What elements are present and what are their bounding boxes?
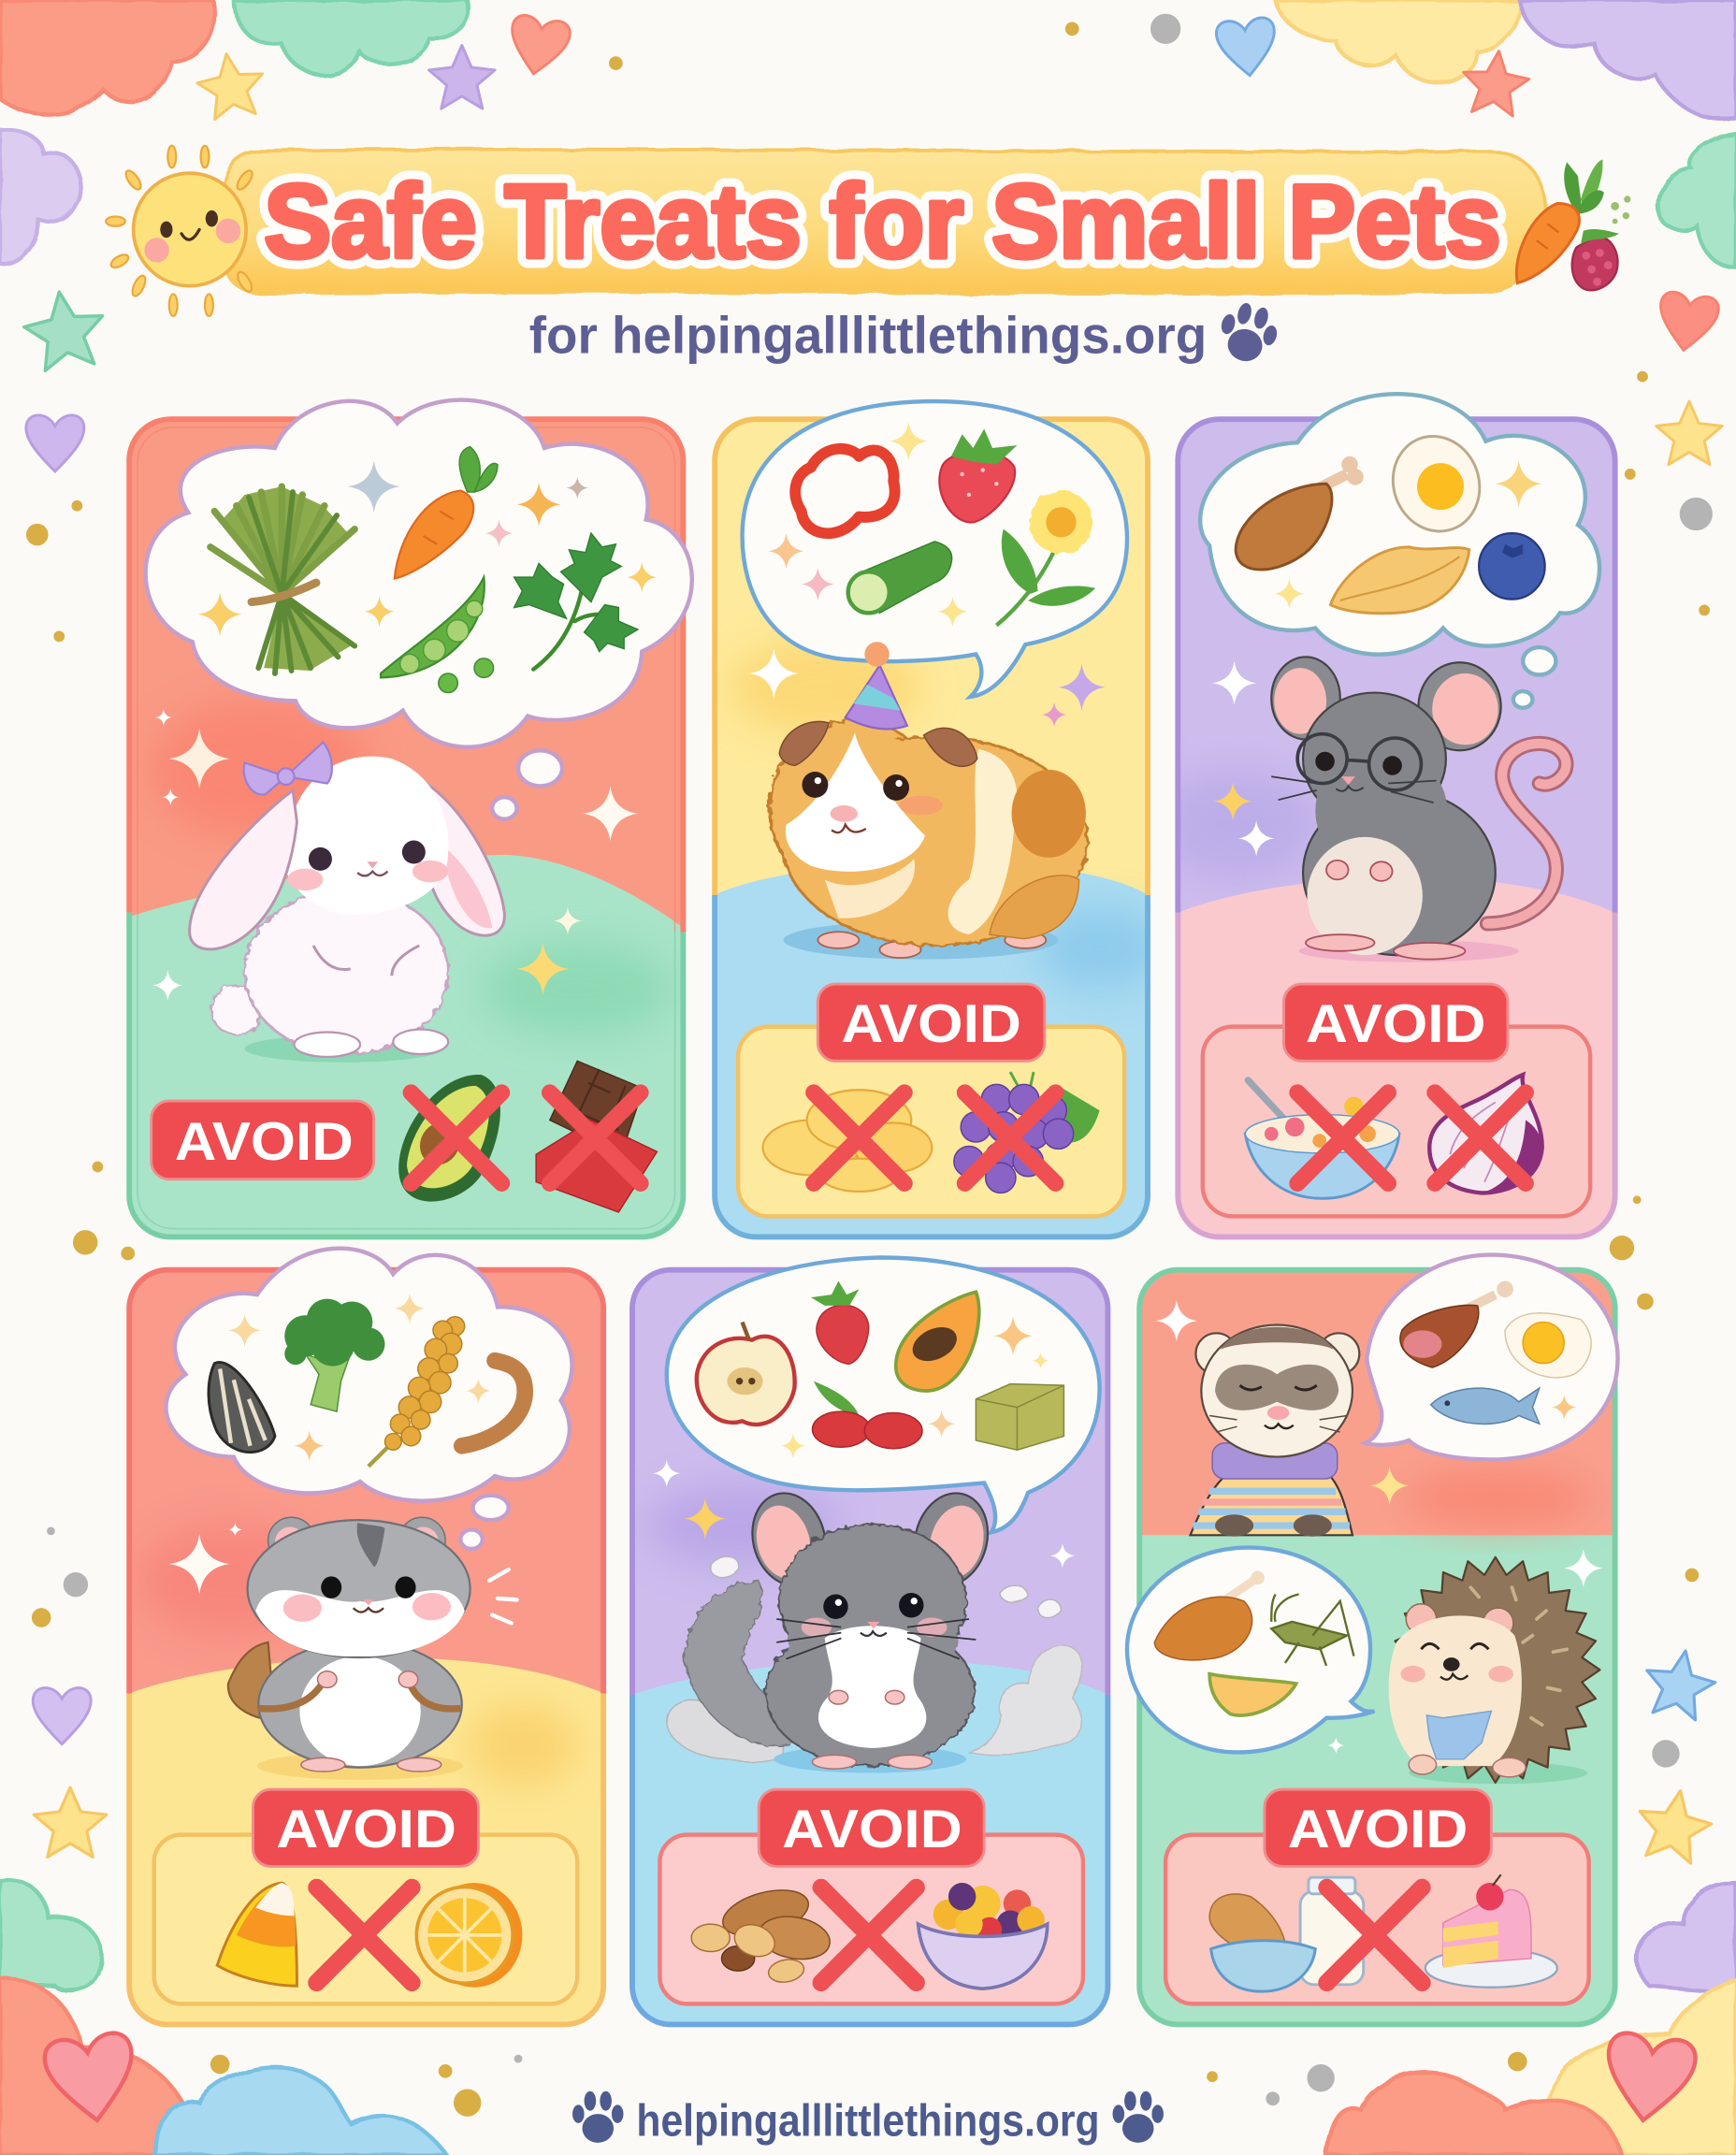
icon: strawberry	[939, 428, 1017, 523]
face	[823, 1594, 848, 1619]
icon: hay cube	[976, 1384, 1063, 1450]
glasses	[1297, 734, 1421, 790]
body	[1303, 693, 1496, 955]
patch	[1012, 770, 1086, 858]
sparkles	[152, 460, 657, 1001]
ears	[1271, 657, 1340, 740]
icon: cucumber	[848, 542, 952, 613]
guinea pig	[770, 642, 1087, 960]
ears	[1195, 1333, 1237, 1374]
ferret	[1191, 1324, 1359, 1537]
icon: potato chips crossed	[763, 1090, 932, 1192]
speech bubble lower	[1127, 1548, 1374, 1752]
right ear	[426, 784, 504, 935]
panel 2 background	[715, 419, 1162, 1237]
icon: blueberry	[1479, 533, 1545, 600]
avoid pill: AVOID	[782, 1800, 962, 1859]
speech bubble	[743, 401, 1127, 697]
header	[106, 146, 1631, 368]
paws	[313, 946, 419, 976]
head	[248, 1520, 470, 1657]
thought cloud	[166, 1249, 572, 1501]
icon: cereal bowl crossed	[1245, 1080, 1399, 1198]
icon: paw left	[572, 2091, 623, 2143]
left ear	[190, 790, 297, 949]
face	[309, 847, 332, 871]
thought cloud	[1200, 394, 1599, 655]
icon: red cross	[1327, 1887, 1422, 1983]
icon: milk jar	[1300, 1877, 1364, 1985]
icon: header raspberry	[1572, 195, 1631, 290]
head	[1201, 1324, 1353, 1457]
icon: broccoli	[284, 1299, 385, 1411]
icon: red cross	[317, 1887, 412, 1983]
icon: red pepper ring	[795, 449, 895, 533]
avoid pill	[817, 984, 1045, 1061]
icon: sunflower seed	[209, 1362, 275, 1453]
fur outline	[770, 720, 1087, 946]
icon: pea pod	[381, 577, 494, 693]
panel: chinchilla	[632, 1257, 1107, 2024]
avoid pill: AVOID	[1306, 994, 1485, 1054]
face	[321, 1576, 341, 1598]
ears	[268, 1517, 315, 1564]
icon: papaya	[896, 1292, 979, 1391]
feet	[817, 932, 1046, 958]
body	[245, 889, 448, 1054]
sparkles	[1156, 1300, 1602, 1754]
title text: Safe Treats for Small Pets	[264, 163, 1501, 280]
panel 6 background	[1139, 1270, 1615, 2024]
subtitle: for helpingalllittlethings.org	[529, 306, 1207, 365]
footer url: helpingalllittlethings.org	[636, 2095, 1100, 2146]
panel 3 background	[1154, 419, 1615, 1237]
ears	[779, 721, 829, 765]
icon: chicken drumstick	[1236, 456, 1364, 570]
icon: ham leg	[1400, 1280, 1513, 1367]
avoid pill: AVOID	[175, 1112, 354, 1172]
tail	[1487, 744, 1566, 923]
spines	[1391, 1557, 1599, 1783]
party hat	[846, 665, 907, 729]
icon: hay bundle	[210, 486, 354, 673]
sparkles	[749, 422, 1105, 727]
icon: smiling sun	[106, 146, 255, 316]
feet	[295, 1033, 360, 1057]
panel: rabbit	[129, 400, 692, 1237]
paws and feet	[1306, 861, 1465, 960]
face	[1421, 1643, 1488, 1649]
icon: strawberry	[811, 1280, 869, 1364]
icon: dandelion	[996, 491, 1095, 626]
icon: chocolate crossed	[536, 1061, 657, 1212]
footer	[572, 2091, 1164, 2146]
face	[1315, 752, 1335, 771]
face	[1239, 1385, 1317, 1390]
speech bubble top	[1365, 1255, 1618, 1459]
blue toy	[1426, 1711, 1491, 1759]
white blaze	[786, 732, 925, 872]
hedgehog feet	[1409, 1755, 1437, 1774]
icon: mealworm	[462, 1361, 525, 1446]
feet	[301, 1757, 441, 1772]
icon: bowl of dried fruit	[919, 1883, 1048, 1989]
dust clouds	[667, 1556, 1082, 1762]
icon: orange slice	[416, 1883, 522, 1988]
avoid pill	[152, 1101, 374, 1179]
panel 1 background	[129, 419, 683, 1237]
ferret paws	[1215, 1514, 1253, 1537]
head	[282, 757, 448, 915]
face	[802, 772, 828, 798]
thought cloud	[146, 400, 692, 747]
rabbit	[190, 742, 504, 1063]
tail	[211, 986, 261, 1034]
avoid pill: AVOID	[841, 994, 1021, 1054]
icon: melon slice	[1209, 1674, 1296, 1715]
icon: apple half	[697, 1323, 795, 1425]
icon: cake slice on plate	[1425, 1874, 1557, 1988]
icon: mixed nuts	[691, 1882, 833, 1985]
avoid pill	[1265, 1789, 1491, 1866]
panel: ferret and hedgehog	[1127, 1255, 1618, 2024]
hamster hands	[318, 1671, 418, 1687]
icon: cricket	[1271, 1594, 1353, 1666]
icon: roast turkey	[1154, 1571, 1265, 1660]
icon: fish	[1431, 1388, 1540, 1424]
speech bubble	[667, 1257, 1100, 1532]
white body stripe	[948, 749, 1018, 934]
thought bubbles	[1513, 647, 1555, 708]
mouse	[1271, 657, 1566, 962]
white chest and belly	[818, 1626, 926, 1748]
avoid pill	[1283, 984, 1508, 1061]
belly	[1307, 837, 1423, 955]
icon: bread in bowl	[1209, 1894, 1315, 1991]
ears	[1406, 1604, 1437, 1634]
icon: red cross	[821, 1887, 917, 1983]
icon: paw	[1214, 298, 1283, 368]
icon: candy corn	[217, 1883, 297, 1986]
panel: guinea pig	[715, 401, 1162, 1237]
icon: paw right	[1113, 2091, 1164, 2143]
panel: mouse	[1154, 394, 1615, 1237]
thought bubbles	[460, 1496, 509, 1549]
avoid box	[1165, 1835, 1589, 2003]
chinchilla	[685, 1485, 998, 1773]
icon: header carrot	[1516, 159, 1604, 283]
ears	[743, 1485, 835, 1594]
bow	[244, 742, 332, 795]
straps	[258, 1677, 460, 1709]
icon: grapes crossed	[954, 1072, 1100, 1193]
action lines	[489, 1569, 517, 1623]
avoid box	[738, 1027, 1124, 1216]
icon: parsley	[514, 533, 638, 670]
avoid pill: AVOID	[276, 1800, 456, 1859]
sweater	[1191, 1468, 1353, 1535]
spine flecks	[1470, 1587, 1567, 1725]
panel: hamster	[129, 1249, 603, 2024]
avoid box	[659, 1835, 1083, 2003]
feet and paws	[812, 1690, 932, 1769]
icon: pasta shell	[1330, 547, 1469, 614]
icon: avocado crossed	[398, 1075, 501, 1202]
sparkles	[653, 1317, 1075, 1569]
avoid pill	[759, 1789, 984, 1866]
icon: rosehips	[812, 1381, 922, 1449]
avoid box	[154, 1835, 577, 2003]
panel 4 background	[129, 1270, 603, 2024]
icon: fried egg	[1505, 1313, 1591, 1378]
title banner	[220, 150, 1546, 294]
panel 5 background	[632, 1270, 1107, 2024]
avoid pill	[253, 1789, 478, 1866]
icon: millet spray	[369, 1317, 465, 1467]
body	[258, 1641, 462, 1768]
icon: red onion crossed	[1429, 1075, 1542, 1193]
icon: boiled egg	[1380, 424, 1493, 543]
hedgehog	[1389, 1557, 1599, 1784]
tail	[685, 1581, 804, 1746]
face and belly	[1389, 1615, 1522, 1766]
icon: carrot	[395, 447, 498, 579]
avoid pill: AVOID	[1288, 1800, 1468, 1859]
backpack	[228, 1642, 275, 1721]
title text: Safe Treats for Small Pets	[264, 163, 1501, 280]
thought bubbles	[492, 750, 562, 819]
hamster	[228, 1517, 470, 1780]
sparkles	[1212, 460, 1542, 856]
body and head	[766, 1525, 975, 1766]
avoid box	[1203, 1027, 1590, 1216]
sparkles	[169, 1294, 491, 1594]
